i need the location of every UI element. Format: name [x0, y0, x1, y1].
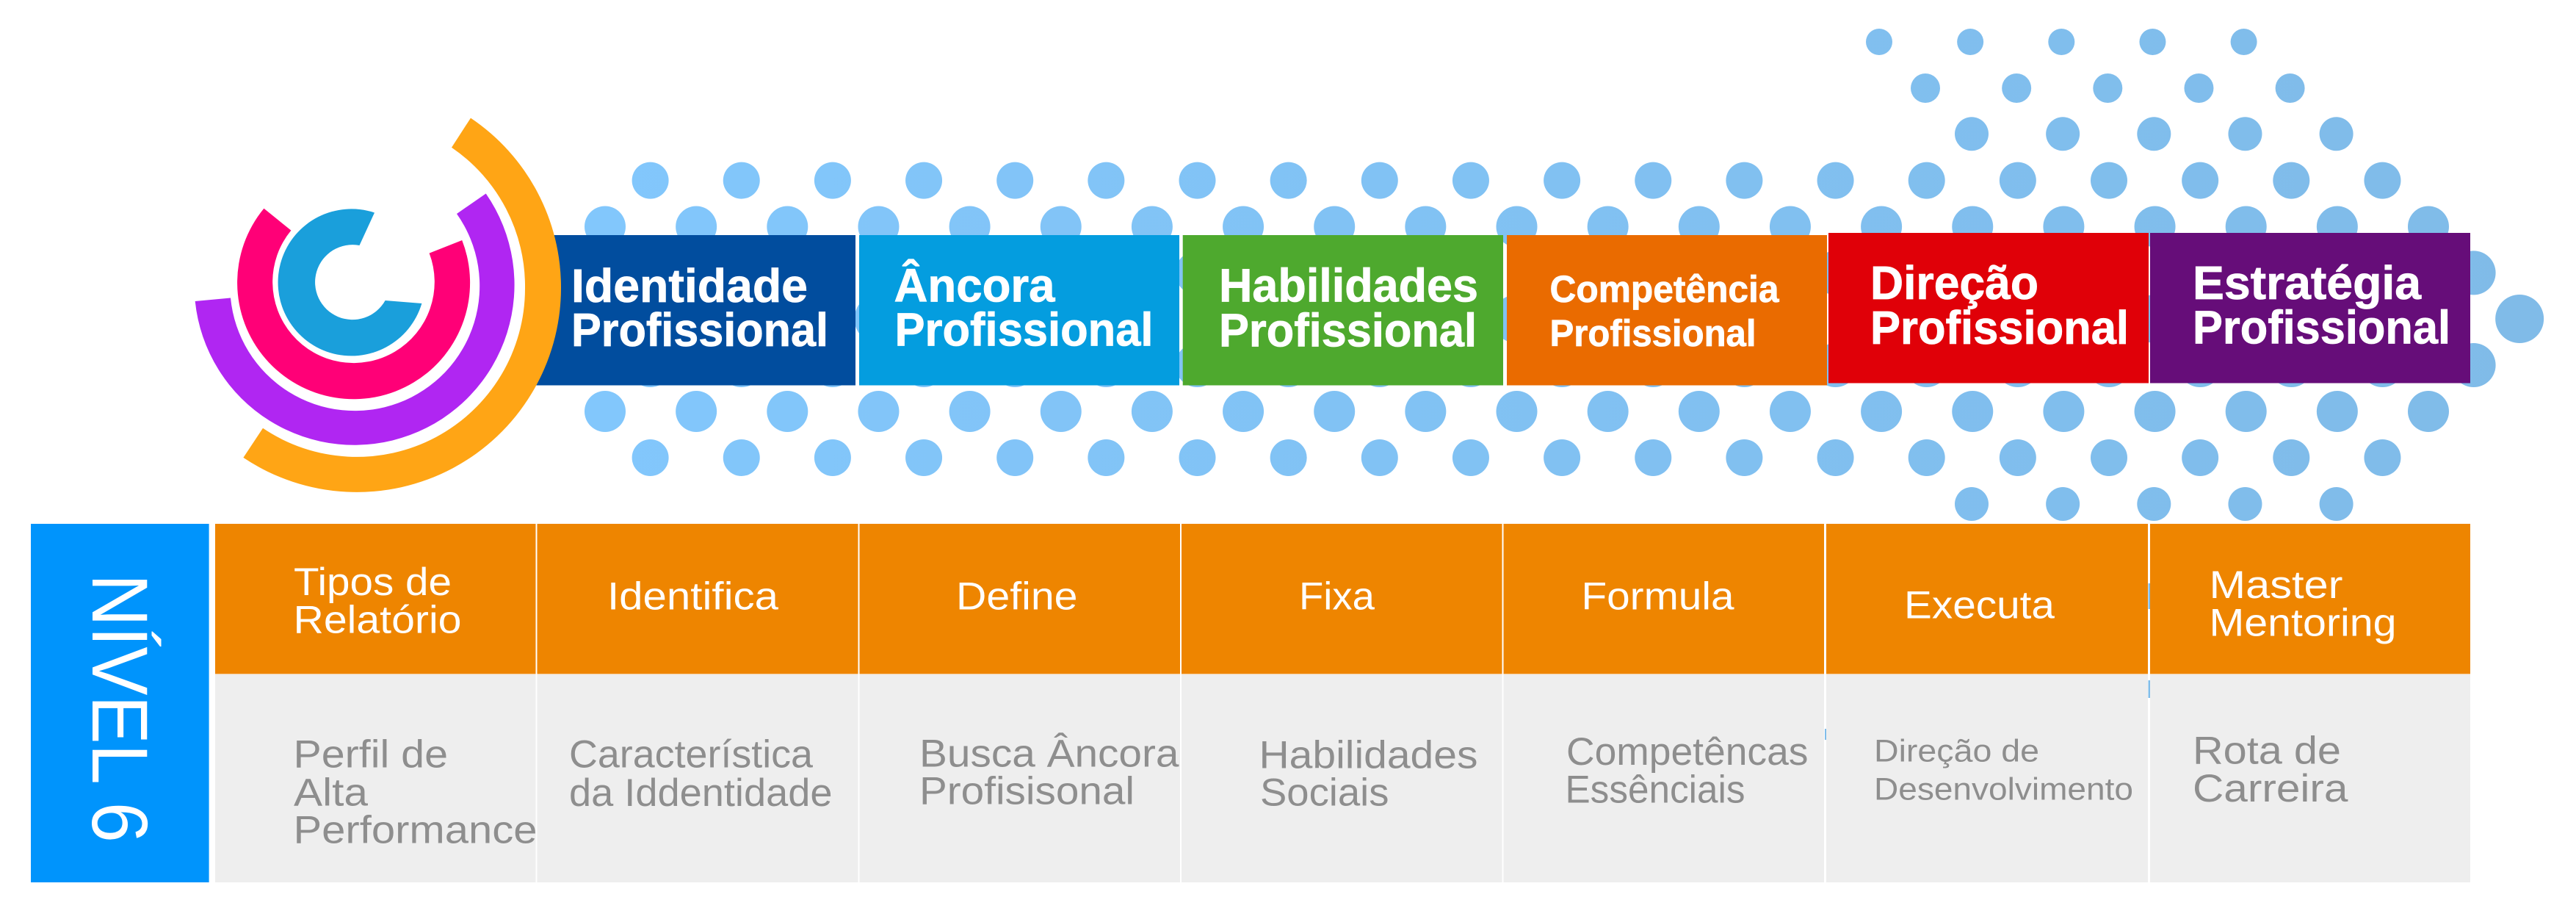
panel: Âncora Profissional: Profissional — [894, 303, 1153, 356]
column 6: Executa: Direção de — [1874, 734, 2039, 769]
column 1: Tipos de Relatório: Performance — [294, 808, 538, 852]
column 7: Master Mentoring — [2193, 563, 2397, 810]
panel: Estratégia Profissional: Profissional — [2193, 300, 2450, 353]
column 1: Tipos de Relatório: Perfil de — [294, 733, 448, 777]
column 1: Tipos de Relatório: Tipos de — [294, 561, 452, 604]
column 3: Define: Define — [956, 575, 1078, 619]
panel: Habilidades Profissional — [1183, 235, 1503, 385]
column 5: Formula — [1566, 575, 1808, 811]
column 1: Tipos de Relatório: Alta — [294, 771, 369, 814]
column 4: Fixa: Habilidades — [1259, 733, 1477, 777]
column 7: Master Mentoring: Carreira — [2193, 767, 2348, 810]
panel: Direção Profissional — [1828, 233, 2149, 384]
panel: Habilidades Profissional: Habilidades — [1219, 259, 1478, 312]
column 7: Master Mentoring: Mentoring — [2209, 601, 2397, 644]
column 4: Fixa — [1259, 575, 1477, 814]
panel: NÍVEL 6 side label — [31, 524, 209, 882]
panel: Competência Profissional: Competência — [1549, 268, 1779, 310]
panel: Competência Profissional — [1507, 235, 1827, 385]
panel: Direção Profissional: Profissional — [1870, 301, 2129, 354]
panel: Âncora Profissional — [859, 235, 1179, 385]
column 3: Define — [919, 575, 1179, 813]
column 4: Fixa: Sociais — [1260, 771, 1389, 814]
column 2: Identifica: Característica — [569, 733, 814, 777]
column 6: Executa: Desenvolvimento — [1874, 772, 2133, 807]
column 7: Master Mentoring: Master — [2209, 563, 2342, 607]
panel: Habilidades Profissional: Profissional — [1219, 304, 1477, 357]
column 4: Fixa: Fixa — [1299, 575, 1375, 619]
icon: concentric arcs logo — [195, 118, 561, 492]
column 7: Master Mentoring: Rota de — [2193, 729, 2341, 773]
column 3: Define: Busca Âncora — [919, 732, 1179, 775]
arc: orange outer — [243, 118, 561, 492]
column 2: Identifica: Identifica — [607, 575, 779, 619]
arc: blue inner — [278, 209, 422, 356]
column 2: Identifica: da Iddentidade — [569, 771, 833, 815]
column 1: Tipos de Relatório: Relatório — [294, 599, 461, 642]
panel: Estratégia Profissional — [2150, 233, 2470, 384]
panel: Direção Profissional: Direção — [1870, 256, 2038, 309]
column 3: Define: Profisisonal — [919, 770, 1135, 813]
panel: Identidade Profissional: Identidade — [571, 259, 808, 312]
panel: Âncora Profissional: Âncora — [894, 259, 1055, 312]
dot pattern arrow background — [605, 42, 2522, 504]
column 6: Executa — [1874, 584, 2133, 807]
column 6: Executa: Executa — [1904, 584, 2055, 627]
column 5: Formula: Essênciais — [1566, 768, 1745, 811]
table background — [215, 524, 2470, 882]
panel: Identidade Profissional: Profissional — [571, 303, 828, 356]
panel: NÍVEL 6 side label: NÍVEL 6 — [76, 574, 164, 843]
panel: Estratégia Profissional: Estratégia — [2193, 256, 2421, 309]
column 5: Formula: Competêncas — [1566, 730, 1808, 774]
column 5: Formula: Formula — [1582, 575, 1734, 619]
column 2: Identifica — [569, 575, 833, 815]
column 1: Tipos de Relatório — [294, 561, 538, 852]
panel: Identidade Profissional — [529, 235, 855, 385]
arc: pink — [237, 209, 470, 399]
panel: Competência Profissional: Profissional — [1549, 312, 1756, 354]
arc: purple — [195, 194, 515, 445]
